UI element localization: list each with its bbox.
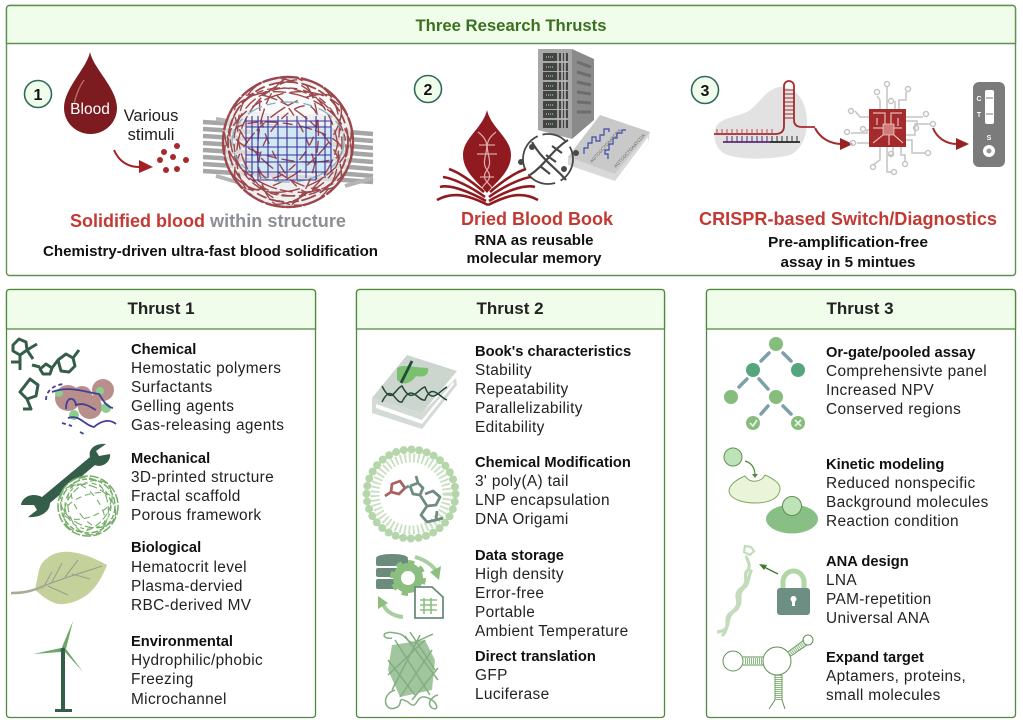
text: ANA design: ANA design	[826, 554, 909, 570]
icon: wind turbine	[33, 621, 83, 712]
text: direct translation: Luciferase	[475, 686, 550, 703]
text: book's characteristics: Stability	[475, 362, 532, 379]
text: chemical: Gas-releasing agents	[131, 417, 284, 434]
subtitle: pre-amplification-free assay: Pre-amplification-free	[768, 235, 928, 251]
scaffold bars	[203, 119, 373, 186]
arrow: stimuli to structure	[114, 150, 153, 173]
blood network	[210, 63, 366, 221]
text: data storage: High density	[475, 566, 564, 583]
text: mechanical: Fractal scaffold	[131, 488, 241, 505]
icon: lipid nanoparticle with molecule	[366, 450, 456, 538]
panel: thrust 3	[706, 290, 1016, 718]
text: mechanical: Mechanical	[131, 451, 210, 467]
text: direct translation: Direct translation	[475, 649, 596, 665]
icon: data server	[538, 49, 594, 139]
arrow: chip to test strip	[933, 128, 969, 150]
label: various stimuli: Various	[124, 107, 178, 125]
icon: editable DNA book	[372, 355, 457, 429]
text: data storage: Ambient Temperature	[475, 623, 629, 640]
heading: dried blood book: Dried Blood Book	[461, 208, 614, 229]
icon: sequence sheets: AGTCGCTGAATCGA	[613, 133, 646, 169]
text: biological: Plasma-dervied	[131, 578, 243, 595]
subtitle: blood solidification: Chemistry-driven ultra-fast blood solidification	[43, 244, 378, 260]
icon: wrench	[21, 444, 110, 517]
icon: ANA helix	[717, 546, 754, 636]
text: chemical modification	[475, 455, 631, 528]
icon: lateral flow test strip	[973, 82, 1005, 167]
text: environmental: Freezing	[131, 671, 194, 688]
text: chemical	[131, 342, 284, 434]
subtitle: RNA memory: molecular memory	[466, 251, 602, 267]
heading: CRISPR-based switch/diagnostics: CRISPR-based Switch/Diagnostics	[699, 208, 997, 229]
panel heading: Thrust 1	[127, 299, 195, 318]
icon: circuit chip	[844, 82, 936, 174]
panel: thrust 2	[356, 290, 664, 718]
text: book's characteristics: Repeatability	[475, 381, 569, 398]
text: data storage: Data storage	[475, 548, 564, 564]
label: various stimuli: stimuli	[128, 126, 174, 144]
text: environmental: Microchannel	[131, 691, 227, 708]
text: chemical: Chemical	[131, 342, 196, 358]
text: or-gate/pooled assay: Or-gate/pooled assay	[826, 345, 976, 361]
icon: lateral flow test strip: S	[987, 135, 992, 142]
text: biological: RBC-derived MV	[131, 597, 252, 614]
text: data storage: Portable	[475, 604, 535, 621]
icon: dried blood book	[437, 110, 538, 205]
label: various stimuli	[124, 107, 178, 144]
badge: number 1: 1	[34, 87, 43, 104]
blue grid	[246, 116, 331, 180]
text: chemical modification: DNA Origami	[475, 511, 569, 528]
arrow: lock to helix	[759, 564, 778, 574]
subtitle: RNA memory	[466, 233, 602, 267]
text: environmental: Hydrophilic/phobic	[131, 652, 263, 669]
text: data storage: Error-free	[475, 585, 544, 602]
icon: blood drop: Blood	[70, 101, 110, 118]
text: ANA design: PAM-repetition	[826, 591, 932, 608]
arrow: switch to chip	[815, 128, 853, 150]
icon: kinetic binding model	[724, 448, 818, 534]
icon: lateral flow test strip: C	[976, 96, 982, 103]
icon: CRISPR switch hairpin	[714, 81, 815, 159]
icon: fibrous sphere	[53, 471, 123, 541]
text: ANA design	[826, 554, 932, 627]
icon: DNA in a circular arrow	[518, 134, 579, 184]
text: or-gate/pooled assay: Comprehensivte panel	[826, 363, 987, 380]
text: book's characteristics: Book's characteristics	[475, 344, 631, 360]
icon: stimuli particles	[157, 143, 189, 173]
text: biological: Hematocrit level	[131, 559, 247, 576]
teal fibres	[232, 102, 344, 182]
panel heading: Thrust 2	[476, 299, 544, 318]
text: chemical modification: Chemical Modification	[475, 455, 631, 471]
icon: GFP protein barrel	[384, 632, 438, 709]
text: ANA design: Universal ANA	[826, 610, 930, 627]
text: kinetic modeling: Kinetic modeling	[826, 457, 944, 473]
text: mechanical: 3D-printed structure	[131, 469, 274, 486]
text: chemical modification: LNP encapsulation	[475, 492, 610, 509]
text: biological	[131, 540, 252, 614]
text: expand target: Expand target	[826, 650, 924, 666]
subtitle: pre-amplification-free assay	[768, 235, 928, 271]
badge: number 1	[24, 80, 52, 108]
text: or-gate/pooled assay	[826, 345, 987, 418]
text: mechanical: Porous framework	[131, 507, 261, 524]
icon: aptamer structure	[723, 635, 813, 709]
text: expand target: small molecules	[826, 687, 941, 704]
panel: thrust 1	[6, 290, 316, 718]
badge: number 3	[692, 76, 718, 104]
heading: solidified blood within structure	[70, 210, 346, 231]
icon: sequence sheets	[568, 115, 650, 188]
icon: decision tree or-gate	[724, 337, 805, 430]
text: chemical modification: 3' poly(A) tail	[475, 473, 569, 490]
badge: number 3: 3	[701, 83, 710, 100]
heading: solidified blood within structure: Solidified blood	[70, 210, 205, 231]
text: direct translation	[475, 649, 596, 703]
text: kinetic modeling: Reduced nonspecific	[826, 475, 976, 492]
heading: solidified blood within structure: within structure	[209, 210, 346, 231]
text: mechanical	[131, 451, 274, 524]
text: ANA design: LNA	[826, 572, 857, 589]
subtitle: pre-amplification-free assay: assay in 5 mintues	[780, 255, 916, 271]
text: biological: Biological	[131, 540, 201, 556]
text: chemical: Surfactants	[131, 379, 213, 396]
icon: blood drop	[64, 52, 117, 134]
text: expand target	[826, 650, 966, 704]
text: environmental: Environmental	[131, 634, 233, 650]
badge: number 2: 2	[424, 82, 433, 99]
icon: molecules and polymers	[11, 339, 116, 434]
text: environmental	[131, 634, 263, 708]
text: chemical: Gelling agents	[131, 398, 234, 415]
panel heading: Thrust 3	[826, 299, 894, 318]
title: Three Research Thrusts	[415, 16, 607, 35]
subtitle: RNA memory: RNA as reusable	[474, 233, 594, 249]
text: book's characteristics: Parallelizability	[475, 400, 583, 417]
text: kinetic modeling: Background molecules	[826, 494, 989, 511]
badge: number 2	[414, 76, 442, 102]
text: kinetic modeling: Reaction condition	[826, 513, 959, 530]
text: book's characteristics: Editability	[475, 419, 545, 436]
icon: sequence sheets: AGTCGCTGAATCGA	[589, 128, 622, 164]
text: or-gate/pooled assay: Increased NPV	[826, 382, 934, 399]
text: or-gate/pooled assay: Conserved regions	[826, 401, 961, 418]
text: direct translation: GFP	[475, 667, 508, 684]
text: chemical: Hemostatic polymers	[131, 360, 281, 377]
text: kinetic modeling	[826, 457, 989, 530]
text: data storage	[475, 548, 629, 640]
icon: lateral flow test strip: T	[977, 112, 982, 119]
text: expand target: Aptamers, proteins,	[826, 668, 966, 685]
illustration: solidified blood within scaffold structure	[203, 63, 373, 221]
icon: padlock	[777, 571, 810, 615]
icon: data storage cycle	[376, 554, 443, 618]
text: book's characteristics	[475, 344, 631, 436]
panel: three research thrusts overview	[6, 6, 1016, 276]
icon: leaf	[11, 552, 107, 604]
